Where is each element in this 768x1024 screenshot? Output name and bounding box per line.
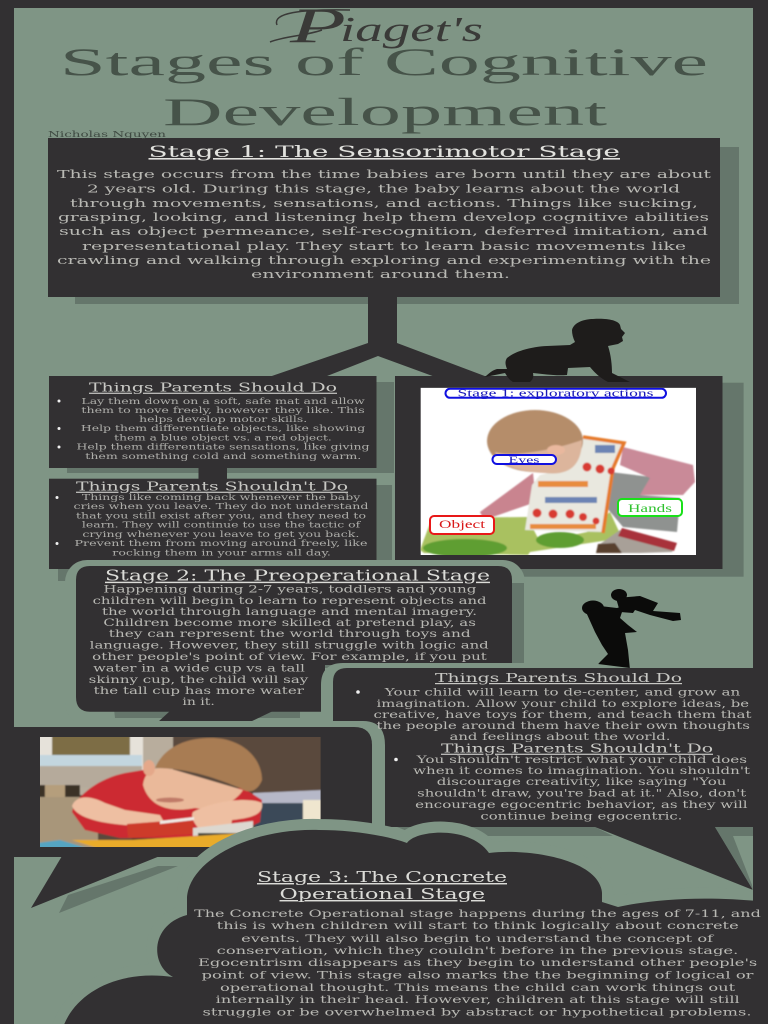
text: stage 2 body: in it. bbox=[182, 696, 215, 708]
panel: stage 3 cloud bbox=[60, 830, 768, 1024]
text: stage 2 shouldn't do heading: Things Parents Shouldn't Do bbox=[441, 742, 713, 756]
text: stage 1 should do list: them to move freely, however they like. This bbox=[81, 406, 365, 416]
object label bbox=[430, 516, 494, 534]
text: stage 2 shouldn't do list: continue being egocentric. bbox=[480, 810, 682, 822]
text: stage 1 body: through movements, sensations, and actions. Things like sucking, bbox=[70, 197, 698, 210]
left bubble tail shadow bbox=[59, 866, 178, 913]
icon: crawling baby silhouette bbox=[485, 319, 630, 382]
text: stage 1 should do list: helps develop motor skills. bbox=[139, 415, 307, 425]
eyes label bbox=[492, 455, 556, 466]
text: stage 2 shouldn't do list: encourage egocentric behavior, as they will bbox=[415, 799, 749, 811]
left photo panel bbox=[0, 727, 372, 857]
text: stage 2 should do list: Your child will learn to de-center, and grow an bbox=[383, 686, 741, 698]
right bubble tail bbox=[595, 827, 753, 890]
text: stage 2 body: language. However, they still struggle with logic and bbox=[90, 640, 489, 652]
text: stage 1 body bbox=[57, 168, 712, 281]
text: stage 2 body: the tall cup has more water bbox=[94, 685, 305, 697]
text: stage 1 shouldn't do list: Prevent them from moving around freely, like bbox=[74, 539, 368, 549]
text: stage 3 body bbox=[194, 908, 761, 1018]
text: stage 3 body: struggle or be overwhelmed by abstract or hypothetical problems. bbox=[202, 1006, 752, 1018]
photo scene bbox=[38, 735, 323, 849]
text: stage 1 body: such as object permeance, self-recognition, deferred imitation, and bbox=[59, 225, 708, 238]
text: stage 1 shouldn't do list: rocking them in your arms all day. bbox=[112, 549, 331, 559]
panel: stage 2 bubble shadow bbox=[100, 583, 524, 718]
text: stage 3 body: events. They will also begin to understand the concept of bbox=[241, 933, 715, 945]
text: stage 2 should do list: imagination. Allow your child to explore ideas, be bbox=[376, 698, 749, 710]
text: stage 1 should do list: Help them differentiate sensations, like giving bbox=[76, 443, 370, 453]
text: stage 2 should do heading: Things Parents Should Do bbox=[435, 671, 682, 685]
left photo panel outer ring bbox=[0, 721, 385, 835]
text: stage 1 shouldn't do list: cries when you leave. They do not understand bbox=[74, 502, 369, 512]
text: stage 2 shouldn't do list: when it comes to imagination. You shouldn't bbox=[413, 765, 751, 777]
text: stage 1 should do list: them a blue object vs. a red object. bbox=[114, 434, 332, 444]
text: stage 3 body: operational thought. This means the child can work things out bbox=[220, 982, 736, 994]
left bubble tail bbox=[31, 856, 160, 908]
text: stage 1 body: crawling and walking through exploring and experimenting with the bbox=[57, 254, 711, 267]
text: stage 2 body: Happening during 2-7 years, toddlers and young bbox=[103, 584, 477, 596]
panel: stage 2 parents bbox=[333, 668, 768, 827]
text: stage 1 shouldn't do list: learn. They will continue to use the tactic of bbox=[82, 521, 362, 531]
frame: left middle fill bbox=[0, 721, 14, 1024]
text: stage 1 should do list bbox=[58, 397, 370, 462]
text: stage 3 body: point of view. This stage also marks the the beginning of logical or bbox=[202, 970, 755, 982]
text: stage 2 shouldn't do list: You shouldn't restrict what your child does bbox=[415, 754, 747, 766]
panel: things parents should do bbox=[49, 376, 376, 468]
exploratory actions label bbox=[446, 388, 666, 400]
text: stage 1 body: grasping, looking, and listening help them develop cognitive abilities bbox=[58, 211, 710, 224]
text: stage 2 body bbox=[89, 584, 489, 708]
hands label bbox=[618, 499, 682, 516]
text: stage 3 body: Egocentrism disappears as they begin to understand other people's bbox=[198, 957, 757, 969]
exploratory actions label: Stage 1: exploratory actions bbox=[458, 388, 654, 400]
panel: stage 2 bubble bbox=[76, 566, 512, 712]
icon: parent lifting child silhouette bbox=[582, 589, 681, 670]
text: stage 2 body: Children become more skilled at pretend play, as bbox=[103, 617, 476, 629]
connector: branching stem bbox=[266, 297, 490, 378]
text: stage 1 body: This stage occurs from the time babies are born until they are about bbox=[57, 168, 712, 181]
text: stage 1 heading: Stage 1: The Sensorimotor Stage bbox=[148, 142, 620, 161]
title: Development: Development bbox=[163, 91, 607, 134]
text: stage 2 shouldn't do list bbox=[394, 754, 751, 822]
text: stage 2 heading: Stage 2: The Preoperational Stage bbox=[105, 569, 490, 585]
text: stage 3 body: internally in their head. However, children at this stage will still bbox=[216, 994, 741, 1006]
panel: things parents shouldn't do bbox=[49, 479, 376, 569]
panel: stage 1 intro shadow bbox=[75, 147, 739, 304]
text: stage 2 body: skinny cup, the child will say bbox=[89, 674, 308, 686]
text: stage 1 should do list: Help them differentiate objects, like showing bbox=[81, 424, 366, 434]
text: stage 1 should do heading: Things Parents Should Do bbox=[89, 381, 337, 395]
text: stage 3 heading: Stage 3: The Concrete bbox=[257, 870, 507, 886]
text: stage 2 shouldn't do list: shouldn't draw, you're bad at it." Also, don't bbox=[417, 788, 747, 800]
text: stage 2 body: they can represent the world through toys and bbox=[109, 628, 471, 640]
text: stage 3 heading: Operational Stage bbox=[280, 887, 485, 903]
panel: should do shadow bbox=[67, 382, 394, 473]
text: stage 1 body: environment around them. bbox=[251, 268, 510, 281]
author: Nicholas Nguyen bbox=[48, 130, 167, 140]
text: stage 2 should do list bbox=[356, 686, 753, 743]
text: stage 1 shouldn't do heading: Things Parents Shouldn't Do bbox=[76, 480, 348, 494]
text: stage 3 body: conservation, which they couldn't before in the previous stage. bbox=[217, 945, 738, 957]
panel: photo frame bbox=[395, 376, 722, 569]
bubble tail bbox=[158, 711, 273, 722]
text: stage 2 should do list: and feelings about the world. bbox=[450, 731, 670, 743]
text: stage 2 should do list: the people around them have their own thoughts bbox=[376, 720, 750, 732]
panel: shouldn't do shadow bbox=[58, 485, 392, 581]
photo: boy playing with toy truck bbox=[38, 735, 323, 849]
panel: stage 2 outer ring bbox=[65, 560, 525, 725]
panel: photo shadow bbox=[410, 383, 744, 577]
text: stage 1 shouldn't do list: crying whenever you leave to get you back. bbox=[82, 530, 359, 540]
text: stage 1 shouldn't do list bbox=[56, 493, 369, 559]
title bbox=[60, 0, 708, 134]
panel: stage 1 intro bbox=[48, 138, 720, 297]
text: stage 1 should do list: them something cold and something warm. bbox=[85, 452, 361, 462]
right tail shadow bbox=[715, 827, 753, 890]
text: stage 2 body: other people's point of view. For example, if you put bbox=[92, 651, 488, 663]
text: stage 2 body: the world through language and mental imagery. bbox=[102, 606, 477, 618]
object label: Object bbox=[439, 519, 486, 531]
text: stage 2 should do list: creative, have toys for them, and teach them that bbox=[374, 709, 753, 721]
panel shadow strip bbox=[397, 827, 613, 836]
text: stage 3 heading bbox=[257, 870, 507, 903]
panel: stage 2 parents outer ring bbox=[321, 663, 768, 730]
connector: parents panels bbox=[198, 466, 227, 480]
frame: right lower fill bbox=[753, 668, 768, 1024]
text: stage 1 should do list: Lay them down on a soft, safe mat and allow bbox=[81, 397, 366, 407]
text: stage 3 body: The Concrete Operational stage happens during the ages of 7-11, and bbox=[194, 908, 761, 920]
text: stage 2 body: water in a wide cup vs a tall bbox=[93, 662, 306, 674]
title: Piaget's: iaget's bbox=[340, 10, 483, 49]
hands label: Hands bbox=[628, 503, 673, 515]
text: stage 1 shouldn't do list: Things like coming back whenever the baby bbox=[82, 493, 361, 503]
text: stage 1 body: 2 years old. During this stage, the baby learns about the world bbox=[87, 182, 680, 196]
figure: baby exploratory actions bbox=[420, 388, 696, 557]
title flourish bbox=[270, 10, 350, 42]
title: Stages of Cognitive: Stages of Cognitive bbox=[60, 41, 708, 84]
text: stage 1 shouldn't do list: that you still exist after you, and they need to bbox=[76, 512, 366, 522]
text: stage 2 shouldn't do list: discourage creativity, like saying "You bbox=[437, 776, 727, 788]
text: stage 2 body: children will begin to learn to represent objects and bbox=[93, 595, 487, 607]
baby drawing bbox=[420, 410, 695, 557]
text: stage 1 body: representational play. They start to learn basic movements like bbox=[82, 240, 686, 253]
text: stage 3 body: this is when children will start to think logically about concrete bbox=[217, 920, 739, 932]
eyes label: Eyes bbox=[508, 456, 540, 466]
